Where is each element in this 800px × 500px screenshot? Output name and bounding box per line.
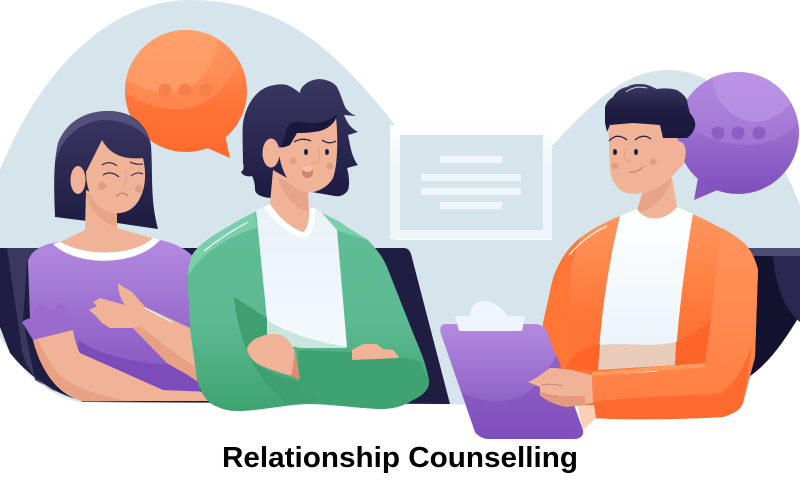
face <box>86 140 145 213</box>
ear <box>70 166 86 194</box>
title: Relationship Counselling <box>222 442 578 474</box>
neck <box>637 177 677 222</box>
counsellor hand <box>528 368 596 430</box>
arm raised and hand <box>89 283 198 382</box>
t-shirt <box>598 207 693 370</box>
hand right <box>352 344 399 360</box>
hair <box>54 111 158 229</box>
ear <box>262 138 280 168</box>
crossed arm dark fold <box>234 297 320 405</box>
clipboard <box>440 301 583 439</box>
speech bubble: purple <box>677 72 799 200</box>
t-shirt <box>28 240 200 402</box>
neck <box>270 170 309 232</box>
sleeve cuff <box>22 303 74 340</box>
t-shirt collar <box>263 204 315 238</box>
sofa right <box>745 248 800 376</box>
jacket <box>188 212 429 411</box>
cuff and sleeve edge <box>592 363 705 376</box>
neck and chest <box>55 190 160 262</box>
whiteboard panel <box>390 125 552 239</box>
hair <box>605 84 695 138</box>
face <box>608 118 678 194</box>
person: woman on left <box>22 111 212 402</box>
jacket <box>541 214 758 419</box>
ear <box>668 140 686 175</box>
jacket left shade <box>541 238 580 370</box>
person: counsellor on right <box>541 84 758 419</box>
t-shirt <box>256 207 347 348</box>
sofa left <box>0 248 450 404</box>
forearm <box>298 350 429 409</box>
person: man in centre <box>188 79 429 411</box>
jacket right lighter panel <box>592 228 758 417</box>
shoulder highlights <box>188 212 257 275</box>
hand left <box>247 334 300 380</box>
speech bubble: orange <box>125 30 247 158</box>
hair <box>241 79 358 198</box>
arm lower <box>33 330 212 401</box>
face <box>278 118 337 192</box>
